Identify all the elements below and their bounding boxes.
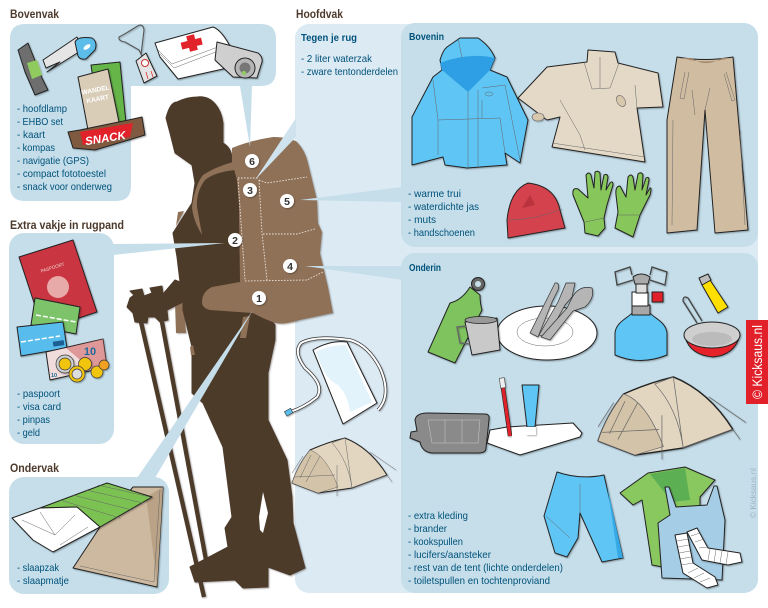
pointer: bovenin [300,187,402,202]
icon: banknote: 10 [84,346,96,358]
heading: Bovenvak: Bovenvak [10,9,60,21]
list: Bovenin [408,188,479,239]
list: Ondervak: - slaapmatje [17,575,69,587]
icon: map beige [78,69,120,130]
marker 5: 5 [284,196,290,208]
block: Tegen je rug: Tegen je rug [301,32,357,44]
trekking poles [141,322,206,597]
backpack body [202,137,333,324]
icon: toothpaste [522,385,539,435]
icon: gloves [573,171,651,237]
icon: jacket [412,38,528,168]
icon: blue card [17,322,67,356]
list: Bovenvak: - navigatie (GPS) [17,155,89,167]
marker 4 [283,259,297,273]
icon: sweater [518,50,663,162]
panel: Onderin [401,253,758,593]
icon: passport [19,240,97,330]
number markers [228,154,297,305]
marker 3 [243,183,257,197]
marker 3: 3 [247,185,253,197]
heading: Hoofdvak: Hoofdvak [296,9,344,21]
panel: Ondervak [9,477,169,594]
list: Bovenin: - warme trui [408,188,461,200]
icon: headlamp [43,37,96,72]
icon: toiletry bag [410,413,489,453]
person [127,97,305,588]
list: Bovenin: - handschoenen [408,227,475,239]
icon: GPS [18,43,48,95]
icon: map green [91,62,126,127]
pocket seams [238,177,323,281]
hiker silhouette with backpack [127,97,333,597]
icon: passport: PASPOORT [40,262,65,274]
icon: large tent [598,377,746,459]
list: Extra vakje: - paspoort [17,388,60,400]
heading: Extra vakje in rugpand: Extra vakje in rugpand [10,220,124,232]
marker 1: 1 [256,293,262,305]
heading: Onderin: Onderin [409,262,441,274]
list: Bovenvak: - compact fototoestel [17,168,106,180]
icon: map beige: KAART [86,94,110,105]
block: Tegen je rug: - zware tentonderdelen [301,66,398,78]
icon: banknote [46,339,107,380]
list: Extra vakje [17,388,61,439]
icon: trousers [667,57,748,233]
heading: Ondervak: Ondervak [10,463,60,475]
list: Bovenvak: - kaart [17,129,45,141]
icon: blue tights [544,472,623,562]
shoulder strap [192,162,235,235]
list: Onderin: - lucifers/aansteker [408,549,491,561]
marker 5 [280,194,294,208]
icon: map beige: WANDEL [81,84,110,97]
list: Onderin: - toiletspullen en tochtenproviand [408,575,550,587]
icon: gas burner [615,267,667,360]
block: Tegen je rug [301,32,398,78]
icon: socks [675,528,742,588]
icon: sleeping bag [12,483,152,552]
panel: Extra vakje in rugpand [9,233,114,444]
credit tag: Kicksaus.nl: © Kicksaus.nl [750,325,765,399]
credit tag: Kicksaus.nl [746,320,768,404]
icon: toothbrush [499,378,510,436]
icon: banknote: 10 [51,373,57,379]
list: Onderin [408,510,563,587]
icon: toiletry towel [487,423,582,455]
panel: Hoofdvak background [295,24,758,593]
backpack lower strap [175,303,186,333]
list: Bovenvak: - snack voor onderweg [17,181,112,193]
list: Ondervak: - slaapzak [17,562,60,574]
icon: small tent [292,438,396,496]
panel: Bovenvak [10,24,276,201]
backpack waist strap piece [176,211,250,355]
list: Onderin: - extra kleding [408,510,468,522]
panel: Bovenin [401,23,758,247]
marker 2: 2 [232,235,238,247]
list: Bovenin: - muts [408,214,436,226]
marker 1 [252,291,266,305]
icon: plate [497,306,597,360]
icon: water bottle [428,278,484,363]
icon: sleeping mat [73,487,163,587]
pointer: onderin [305,266,403,280]
gap between legs [259,492,268,533]
pointer: bovenvak [240,86,252,147]
list: Onderin: - kookspullen [408,536,463,548]
icon: compass [119,25,157,83]
icon: camera [215,42,262,78]
pointer: tegen je rug [255,118,296,180]
list: Bovenvak: - kompas [17,142,55,154]
icon: beanie [507,183,565,238]
icon: lighter [699,274,728,313]
list: Extra vakje: - pinpas [17,414,50,426]
list: Bovenvak: - hoofdlamp [17,103,67,115]
icon: first aid kit [155,27,232,79]
icon: snack bar: SNACK [84,130,127,148]
list: Extra vakje: - geld [17,427,40,439]
icon: water bladder [284,338,386,424]
icon: cutlery [530,283,593,340]
icon: tank top [658,486,725,580]
icon: mug [457,316,500,355]
icon: frying pan [683,297,740,357]
list: Bovenvak [17,103,112,193]
marker 6: 6 [249,156,255,168]
list: Extra vakje: - visa card [17,401,61,413]
list: Ondervak [17,562,69,587]
list: Onderin: - brander [408,523,447,535]
marker 2 [228,233,242,247]
icon: snack bar [68,117,145,150]
marker 4: 4 [287,261,293,273]
pointer: extra vakje [113,243,225,255]
watermark: Kicksaus.nl: © Kicksaus.nl [748,468,758,518]
marker 6 [245,154,259,168]
icon: coins [56,355,109,382]
list: Onderin: - rest van de tent (lichte onderdelen) [408,562,563,574]
icon: green t-shirt [620,467,715,568]
pointer: ondervak [137,310,253,478]
list: Bovenvak: - EHBO set [17,116,63,128]
block: Tegen je rug: - 2 liter waterzak [301,53,373,65]
list: Bovenin: - waterdichte jas [408,201,479,213]
icon: green card [31,298,80,334]
heading: Bovenin: Bovenin [409,31,444,43]
